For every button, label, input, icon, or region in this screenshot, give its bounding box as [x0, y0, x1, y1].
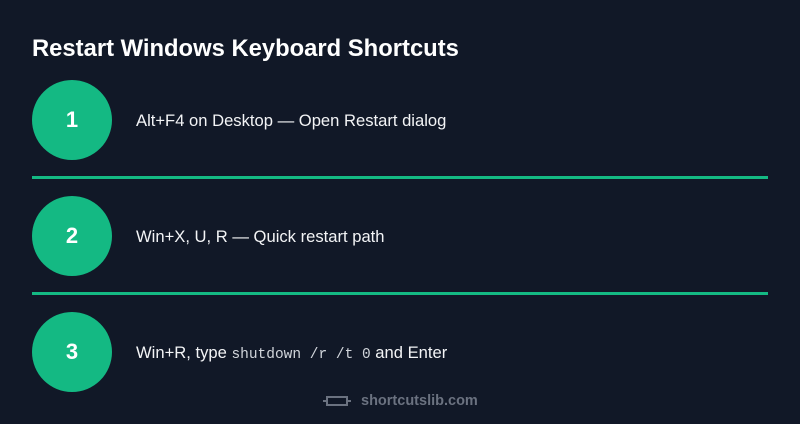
step 3 — [32, 312, 447, 392]
step 1 — [32, 80, 446, 160]
icon: keyboard — [323, 396, 351, 406]
footer: shortcutslib.com — [361, 393, 478, 409]
text 1: Alt+F4 on Desktop — Open Restart dialog — [136, 111, 446, 130]
text 2: Win+X, U, R — Quick restart path — [136, 227, 385, 246]
badge 2 — [32, 196, 112, 276]
badge 1: 1 — [66, 107, 78, 132]
title: Restart Windows Keyboard Shortcuts — [32, 35, 459, 62]
badge 2: 2 — [66, 223, 78, 248]
badge 1 — [32, 80, 112, 160]
badge 3 — [32, 312, 112, 392]
step 2 — [32, 196, 385, 276]
badge 3: 3 — [66, 339, 78, 364]
text 3: Win+R, type shutdown /r /t 0 and Enter — [136, 343, 447, 363]
